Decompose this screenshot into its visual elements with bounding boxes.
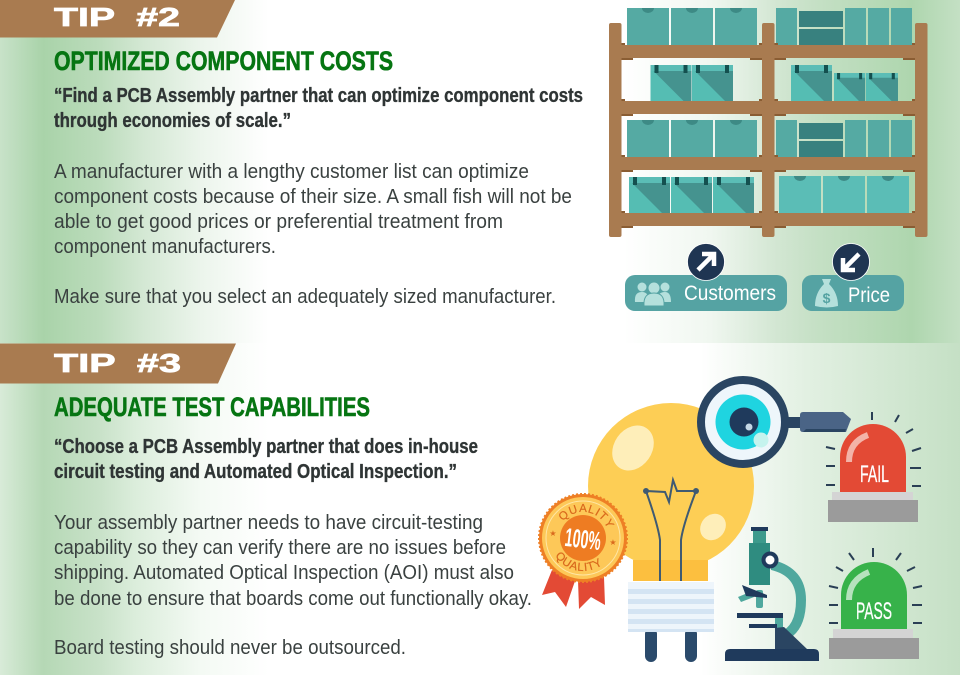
text block: tip 3 body: Board testing should never be outsourced. — [54, 637, 406, 659]
ribbon — [542, 570, 575, 607]
icon: money bag: $ — [823, 290, 831, 306]
heading: optimized component costs: OPTIMIZED COMPONENT COSTS — [54, 46, 393, 76]
text block: tip 3 body — [54, 512, 532, 659]
icon: pass alarm — [829, 548, 922, 659]
badge: price down: Price — [848, 284, 890, 307]
badge: price down — [802, 244, 904, 311]
banner: tip 3 — [0, 344, 236, 384]
icon: quality badge: ★ — [549, 529, 557, 538]
quote: tip 3: “Choose a PCB Assembly partner that does in-house — [54, 436, 478, 458]
illustration: warehouse shelves — [609, 8, 928, 237]
banner: tip 3: TIP #3 — [54, 348, 181, 378]
heading: adequate test capabilities: ADEQUATE TEST CAPABILITIES — [54, 392, 370, 422]
icon: arrow up-right — [688, 244, 724, 280]
quote: tip 2: “Find a PCB Assembly partner that can optimize component costs — [54, 85, 583, 107]
badge: customers up — [625, 244, 787, 311]
icon: pass alarm: PASS — [856, 598, 892, 625]
quote: tip 3 — [54, 436, 478, 483]
icon: quality badge: QUALITY — [556, 552, 600, 572]
shelf row 2 boxes — [650, 65, 898, 101]
icon: fail alarm — [826, 412, 921, 522]
icon: customers — [635, 282, 671, 306]
text block: tip 2 body: Make sure that you select an adequately sized manufacturer. — [54, 286, 556, 308]
background: tip 2 section — [0, 0, 960, 343]
icon: quality badge: QUALITY — [559, 504, 614, 526]
banner: tip 2 — [0, 0, 235, 38]
background: tip 3 section — [0, 343, 960, 675]
icon: quality badge: ★ — [609, 538, 617, 547]
icon: quality badge: 100% — [563, 522, 603, 556]
shelf row 4 boxes — [629, 176, 909, 213]
quote: tip 3: circuit testing and Automated Optical Inspection.” — [54, 461, 457, 483]
text block: tip 2 body: component manufacturers. — [54, 236, 276, 258]
shelf row 3 boxes — [627, 120, 912, 157]
illustration: light bulb — [588, 403, 754, 662]
quote: tip 2: through economies of scale.” — [54, 110, 291, 132]
icon: quality badge — [538, 493, 628, 609]
text block: tip 2 body: able to get good prices or preferential treatment from — [54, 211, 503, 233]
text block: tip 3 body: Your assembly partner needs to have circuit-testing — [54, 512, 483, 534]
banner: tip 2: TIP #2 — [54, 2, 180, 32]
text block: tip 3 body: be done to ensure that boards come out functionally okay. — [54, 588, 532, 610]
shelf row 1 boxes — [627, 8, 912, 45]
icon: microscope — [725, 527, 819, 661]
icon: magnifying glass with eye — [701, 380, 851, 464]
text block: tip 2 body: A manufacturer with a lengthy customer list can optimize — [54, 161, 529, 183]
text block: tip 3 body: capability so they can verify there are no issues before — [54, 537, 506, 559]
text block: tip 3 body: shipping. Automated Optical Inspection (AOI) must also — [54, 562, 514, 584]
badge: customers up: Customers — [684, 282, 776, 305]
text block: tip 2 body: component costs because of their size. A small fish will not be — [54, 186, 572, 208]
icon: fail alarm: FAIL — [860, 461, 889, 488]
icon: arrow down-left — [832, 244, 870, 280]
text block: tip 2 body — [54, 161, 572, 308]
quote: tip 2 — [54, 85, 583, 132]
